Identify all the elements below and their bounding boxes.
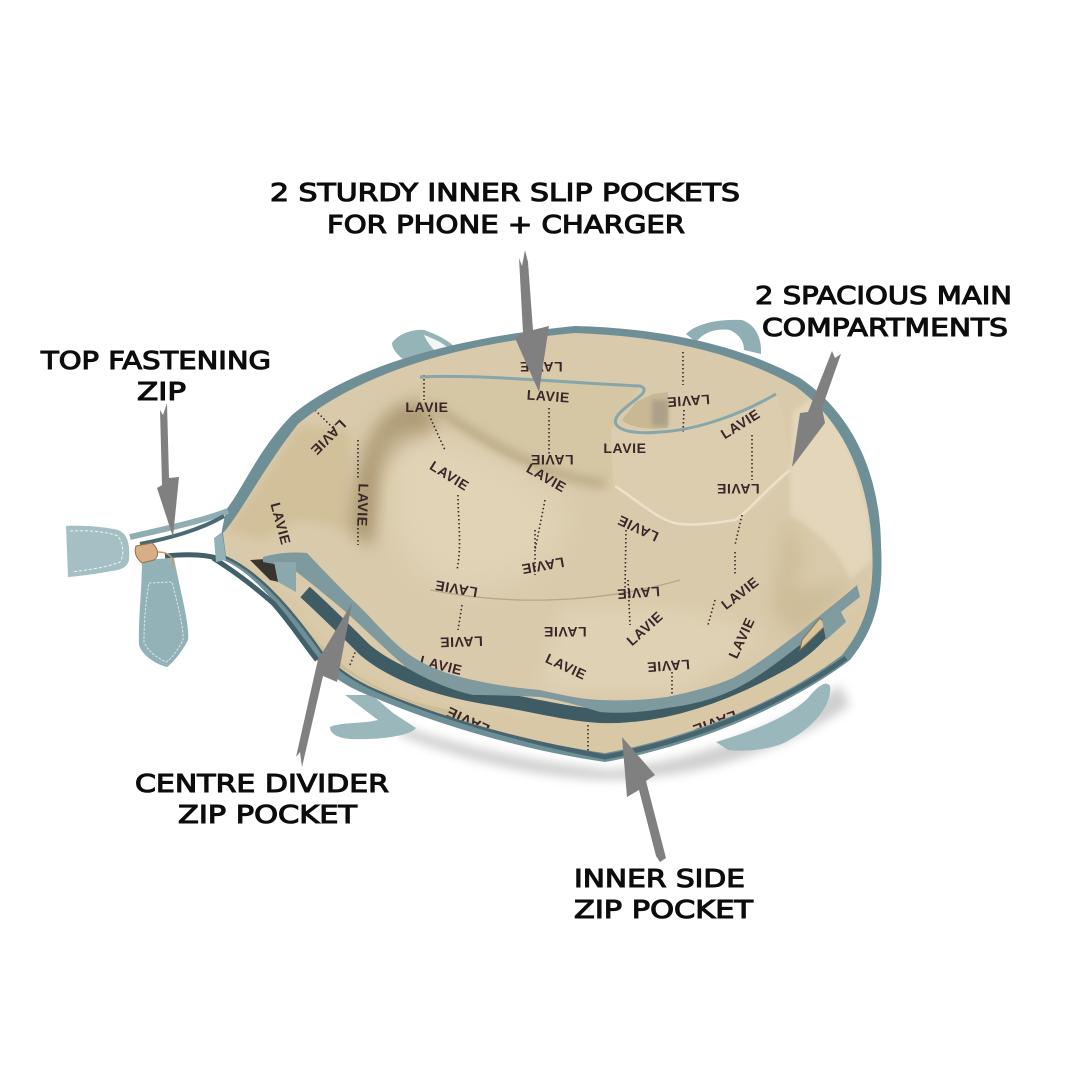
label: slip pockets: FOR PHONE + CHARGER [327, 210, 685, 239]
printed LAVIE logos: LAVIE [616, 584, 660, 602]
lining: LAVIE [690, 706, 739, 738]
label: main compartments: COMPARTMENTS [762, 313, 1008, 342]
printed LAVIE logos: LAVIE [526, 387, 570, 405]
label: top fastening zip: TOP FASTENING [40, 346, 271, 375]
printed LAVIE logos: LAVIE [718, 406, 763, 442]
printed LAVIE logos: LAVIE [308, 417, 349, 458]
label: centre divider zip pocket: CENTRE DIVIDER [135, 769, 389, 798]
printed LAVIE logos: LAVIE [524, 460, 569, 495]
label: centre divider zip pocket [135, 769, 389, 829]
bag outer zip edge [218, 326, 882, 762]
arrow: main compartments [792, 351, 841, 467]
zip pull tab [135, 543, 188, 667]
front lining band [240, 563, 870, 753]
printed LAVIE logos: LAVIE [646, 657, 690, 675]
printed LAVIE logos: LAVIE [716, 481, 760, 497]
printed LAVIE logos: LAVIE [439, 633, 483, 651]
printed LAVIE logos: LAVIE [543, 650, 589, 683]
bottom right handle [716, 684, 830, 751]
printed LAVIE logos: LAVIE [433, 577, 479, 601]
printed LAVIE logos: LAVIE [268, 501, 294, 547]
divider zip puller [800, 606, 846, 650]
top zip tail [130, 511, 228, 537]
small side tab [214, 532, 226, 562]
bottom left handle [330, 695, 416, 739]
top left handle [392, 330, 456, 366]
printed LAVIE logos: LAVIE [427, 458, 472, 494]
ground shadow [400, 685, 850, 780]
printed LAVIE logos: LAVIE [519, 359, 563, 375]
label: slip pockets: 2 STURDY INNER SLIP POCKETS [270, 178, 740, 207]
printed LAVIE logos: LAVIE [418, 652, 464, 678]
printed LAVIE logos: LAVIE [718, 573, 762, 613]
printed LAVIE logos: LAVIE [354, 483, 372, 527]
printed LAVIE logos: LAVIE [623, 608, 666, 649]
label: top fastening zip: ZIP [137, 377, 186, 406]
printed LAVIE logos: LAVIE [405, 399, 449, 415]
printed LAVIE logos: LAVIE [543, 624, 587, 640]
upper pocket [420, 398, 430, 407]
printed LAVIE logos: LAVIE [603, 440, 647, 456]
label: inner side zip pocket: INNER SIDE [574, 864, 745, 893]
arrow: inner side [622, 737, 666, 862]
bag photo [66, 310, 900, 780]
lining [223, 333, 873, 753]
label: inner side zip pocket [574, 864, 754, 924]
top right handle [686, 320, 761, 354]
label: top fastening zip [40, 346, 271, 406]
arrow: top fastening zip [157, 403, 179, 537]
label: centre divider zip pocket: ZIP POCKET [178, 800, 358, 829]
inner slip pocket edge [420, 376, 776, 433]
centre divider zip pocket [250, 552, 860, 716]
label: main compartments [755, 281, 1012, 342]
lining: LAVIE [444, 703, 493, 738]
printed LAVIE logos [270, 352, 760, 696]
printed LAVIE logos: LAVIE [530, 452, 574, 468]
lower zip tail [165, 555, 220, 559]
arrow: centre divider [296, 603, 352, 767]
arrow: slip pockets [515, 250, 549, 392]
label: main compartments: 2 SPACIOUS MAIN [755, 281, 1012, 310]
lining shading [225, 425, 350, 540]
printed LAVIE logos: LAVIE [615, 512, 661, 545]
label: slip pockets [270, 178, 740, 239]
notch [622, 392, 668, 429]
printed LAVIE logos: LAVIE [520, 554, 566, 578]
label: inner side zip pocket: ZIP POCKET [574, 895, 754, 924]
second pocket [612, 426, 614, 468]
printed LAVIE logos: LAVIE [666, 392, 710, 410]
right chamber [790, 397, 872, 580]
printed LAVIE logos: LAVIE [725, 615, 758, 661]
zip end tab [66, 526, 129, 577]
